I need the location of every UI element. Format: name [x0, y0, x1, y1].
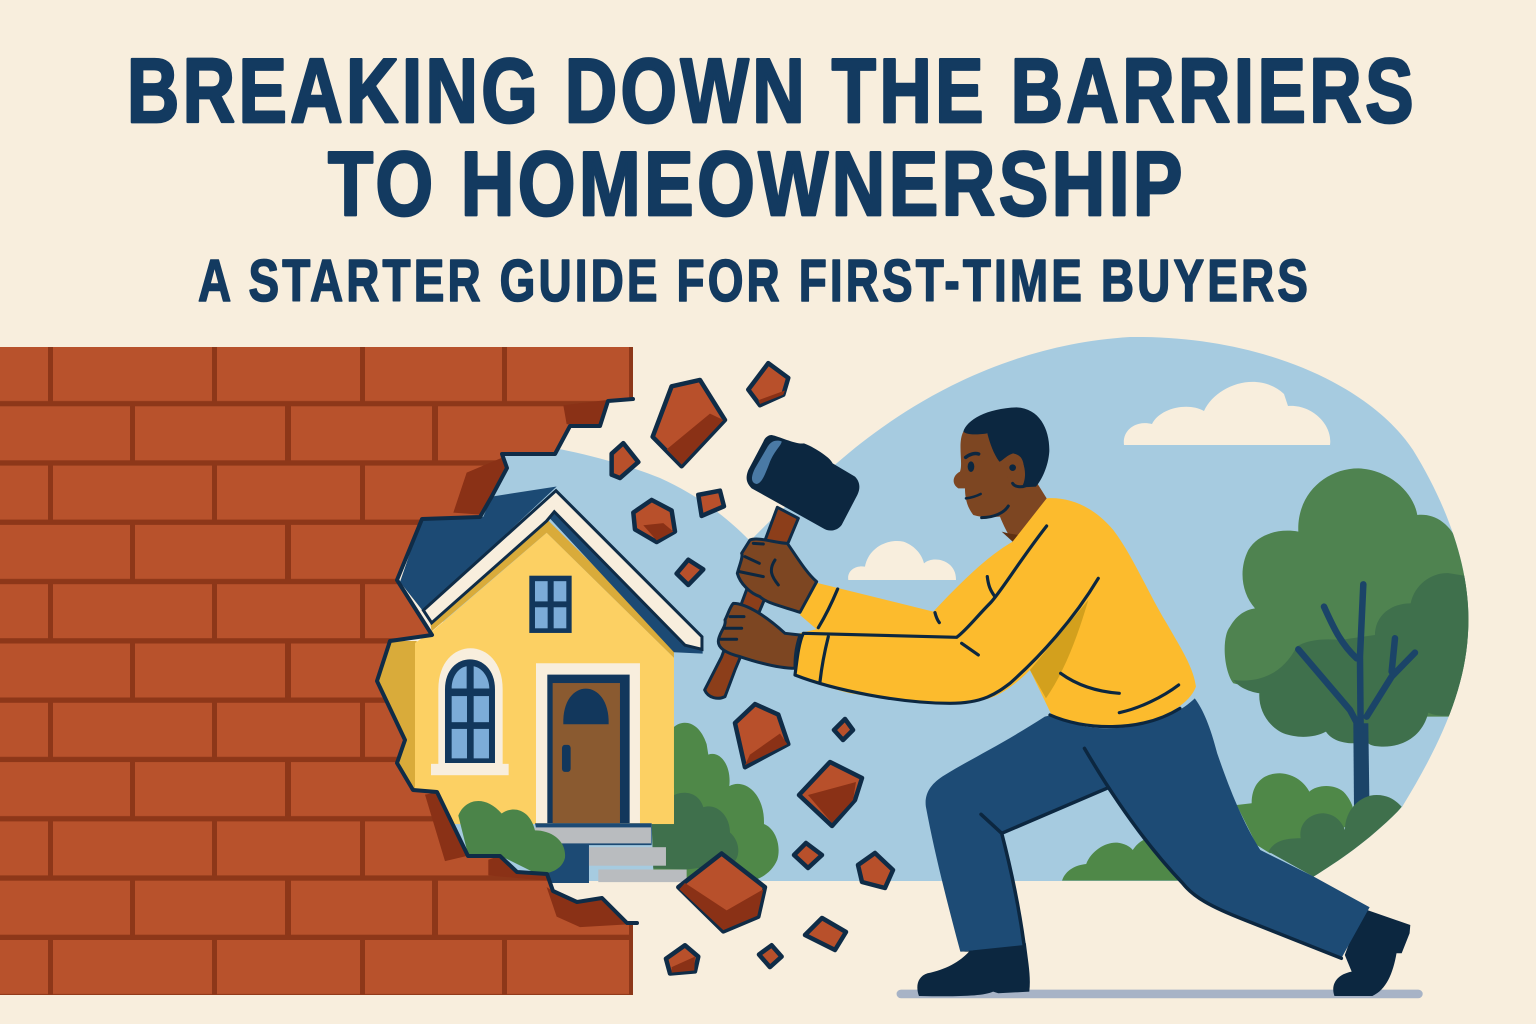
right shoe — [1333, 908, 1410, 996]
neck shadow — [1002, 532, 1018, 542]
cloud: centre — [848, 541, 956, 580]
upper body — [705, 407, 1196, 727]
sweater lines — [795, 526, 1180, 727]
hammer head — [747, 435, 859, 531]
legs — [897, 698, 1423, 998]
bush light — [1237, 773, 1353, 853]
brick wall — [0, 347, 633, 995]
lower hand — [718, 603, 800, 668]
steps — [535, 823, 687, 883]
house — [377, 486, 703, 883]
roof: navy inner strip — [548, 510, 703, 654]
bush dark — [1268, 795, 1402, 877]
window: arched — [431, 648, 509, 775]
neck and face — [954, 432, 1047, 542]
roof: cream fascia — [423, 491, 702, 649]
wall: yellow front — [415, 533, 674, 823]
bush: behind front leg — [1062, 839, 1186, 881]
roof: gold eave shadow — [430, 519, 674, 658]
wall: right edge shading — [629, 347, 633, 995]
hammer handle — [705, 507, 798, 698]
tree trunk — [1298, 584, 1415, 807]
sky backdrop — [380, 337, 1468, 881]
title — [127, 41, 1417, 235]
jeans — [926, 698, 1370, 958]
window: attic — [529, 576, 572, 633]
title: TO HOMEOWNERSHIP — [328, 134, 1186, 235]
ground shadow — [897, 990, 1423, 998]
door — [536, 663, 640, 823]
tree crown light — [1225, 468, 1470, 717]
sweater — [795, 498, 1196, 727]
left shoe — [917, 943, 1030, 996]
hammer highlight — [752, 441, 782, 484]
roof: navy back slope — [400, 486, 557, 611]
tree and right bushes — [1225, 468, 1470, 877]
tree crown dark — [1233, 573, 1470, 747]
upper hand — [737, 539, 817, 612]
cloud: upper right — [1124, 382, 1330, 445]
person — [705, 407, 1423, 998]
facial features — [966, 453, 1025, 518]
ear — [1007, 454, 1024, 484]
bush: right of house — [652, 723, 779, 883]
hair — [963, 407, 1049, 487]
sweater shadow — [1030, 600, 1088, 698]
rubble: lower bricks — [794, 719, 893, 950]
wall: broken brick shading — [425, 397, 633, 927]
wall: shaded side in hole — [377, 641, 417, 791]
bush: left of steps — [458, 801, 565, 874]
wall: hole outline — [377, 399, 637, 923]
rubble: upper bricks — [612, 363, 788, 973]
jeans fold lines — [981, 748, 1341, 958]
